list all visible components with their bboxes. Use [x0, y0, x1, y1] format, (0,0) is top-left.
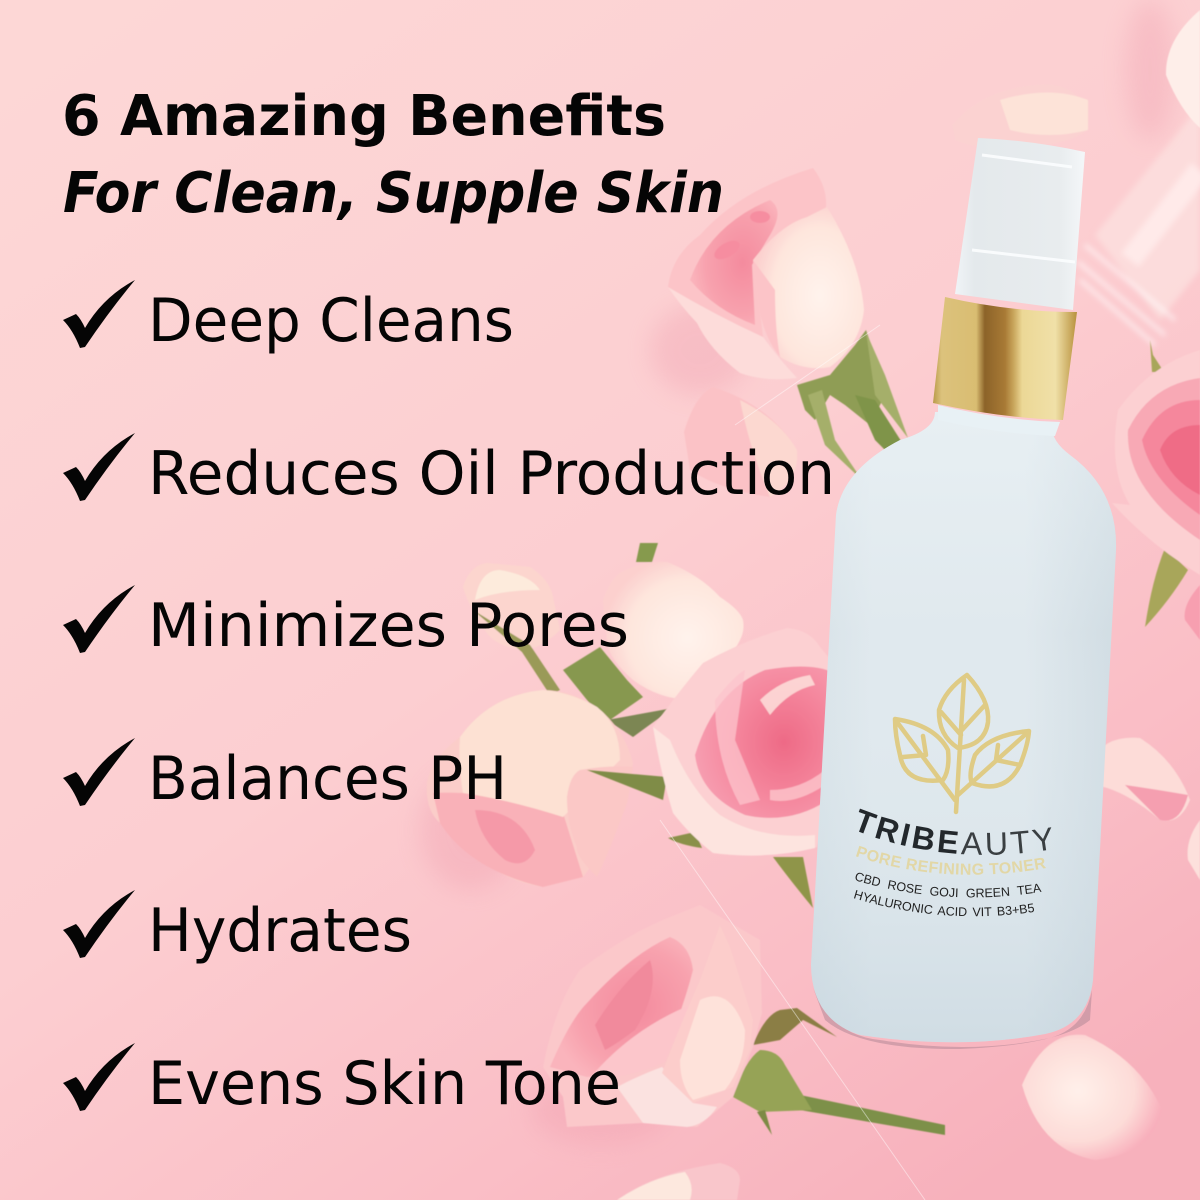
petal: top right	[1166, 10, 1200, 128]
inner pink	[1142, 400, 1200, 515]
benefit: reduces oil: Reduces Oil Production	[148, 439, 835, 509]
logo leaves	[895, 675, 1029, 812]
bottle label text	[854, 808, 1052, 916]
benefits list	[63, 280, 835, 1119]
ingredients line 2	[853, 898, 1090, 916]
sepal mass	[797, 330, 885, 425]
benefit: hydrates	[63, 890, 412, 966]
neck ring	[938, 405, 1060, 436]
light petals	[653, 727, 815, 856]
heading line 1: 6 Amazing Benefits	[62, 84, 666, 149]
rose body	[427, 690, 633, 887]
petal: right edge	[1185, 585, 1200, 640]
outer	[653, 628, 835, 855]
petal: top centre	[952, 84, 1088, 147]
bottle	[811, 138, 1116, 1049]
gold collar	[933, 297, 1077, 420]
rose: middle cream with bud	[427, 543, 744, 887]
product name	[855, 856, 1090, 875]
benefit: minimizes pores: Minimizes Pores	[148, 591, 629, 661]
glass object at top right	[1078, 105, 1200, 345]
front petal	[662, 925, 753, 1103]
bottle body	[811, 412, 1116, 1042]
lower white petal	[617, 1067, 717, 1127]
sepals	[1145, 548, 1188, 627]
outer petals	[543, 905, 762, 1127]
bottle label text: PORE REFINING TONER	[856, 846, 1046, 875]
loose petals	[617, 10, 1200, 1200]
large cream petal	[603, 562, 744, 700]
bottle label text: CBD ROSE GOJI GREEN TEA	[856, 872, 1042, 898]
soft shadows under flowers	[420, 0, 1175, 1145]
side petal	[567, 766, 633, 877]
rose: top	[668, 168, 910, 480]
benefit: balances ph: Balances PH	[148, 744, 507, 814]
benefit: evens skin tone: Evens Skin Tone	[148, 1049, 621, 1119]
petal: behind first rose	[684, 387, 797, 497]
petal: bottom	[617, 1163, 740, 1200]
sepal spikes	[808, 332, 908, 480]
stems	[636, 543, 658, 562]
green leaf	[563, 647, 643, 722]
petal: right edge low	[1188, 820, 1200, 880]
rose: middle pink	[587, 628, 835, 908]
benefit: hydrates: Hydrates	[148, 896, 412, 966]
pink heart	[690, 200, 778, 325]
cream top	[459, 690, 620, 817]
sepal spike long	[855, 395, 910, 465]
upper cream petal	[463, 563, 560, 650]
rose: bottom	[543, 905, 945, 1135]
petal: right middle	[1092, 738, 1190, 821]
spray cap	[955, 138, 1085, 310]
stem	[800, 1095, 945, 1135]
lower pink	[433, 793, 583, 887]
rose: right edge	[1112, 340, 1200, 627]
lower petal	[668, 287, 797, 379]
bottle top highlight	[811, 412, 1116, 1042]
petal: lower right	[1022, 1035, 1162, 1160]
heading	[62, 84, 724, 226]
brand wordmark	[852, 829, 1100, 855]
heading line 2: For Clean, Supple Skin	[63, 161, 724, 226]
cream petal	[753, 207, 864, 368]
bottle shadow	[812, 985, 1092, 1049]
pink upper	[668, 168, 826, 337]
sepals	[587, 770, 667, 800]
sepals	[733, 1050, 812, 1112]
bottle label text: HYALURONIC ACID VIT B3+B5	[854, 890, 1034, 916]
ingredients line 1	[854, 880, 1090, 897]
pink heart	[695, 666, 832, 818]
outer petals	[1112, 350, 1200, 575]
bottle label text: TRIBEAUTY	[858, 808, 1052, 855]
hairline reflections	[660, 325, 925, 1200]
pink heart	[550, 937, 693, 1077]
benefit: deep cleans: Deep Cleans	[148, 286, 514, 356]
